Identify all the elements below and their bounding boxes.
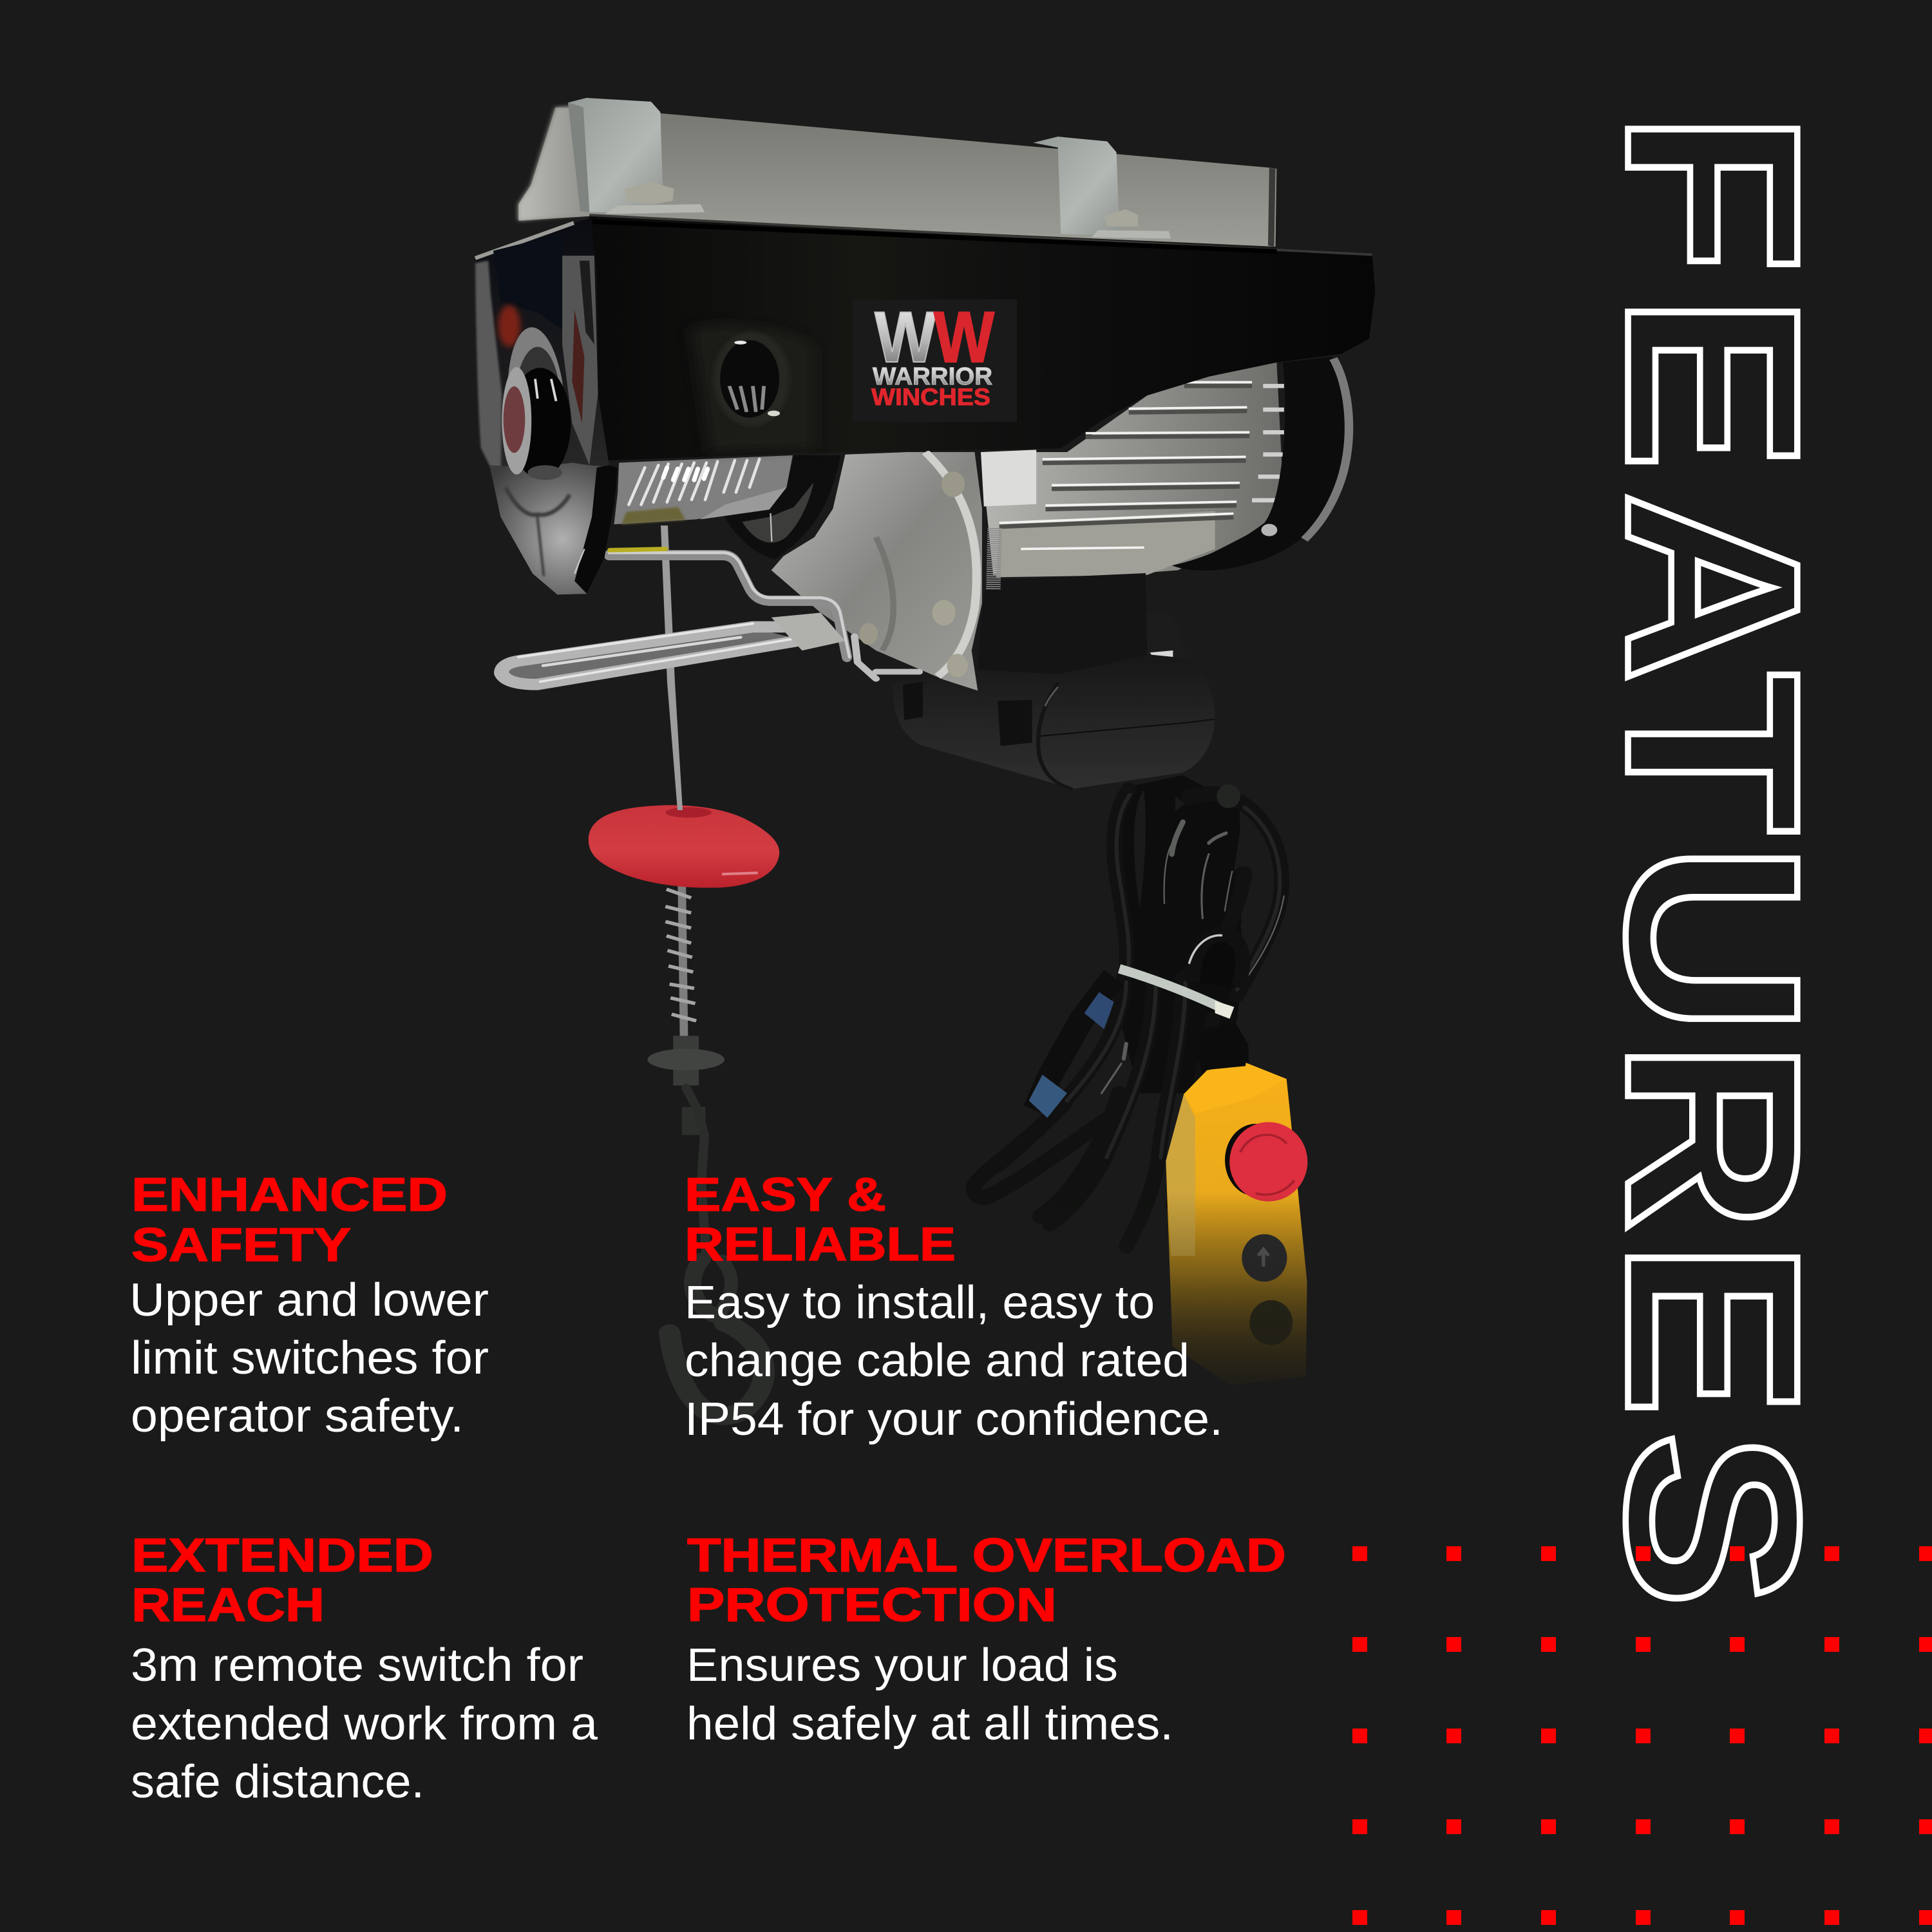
feature: extended reach: [131, 1530, 598, 1808]
upper limit rod: [609, 549, 849, 657]
body: change cable and rated: [685, 1335, 1189, 1387]
black block and control box under motor: [893, 528, 1215, 789]
body: limit switches for: [131, 1332, 489, 1384]
up button: [1242, 1234, 1287, 1282]
logo: Warrior Winches: [853, 297, 1017, 422]
holes between cables: [1134, 790, 1146, 908]
axle cap: [502, 367, 531, 475]
housing sheen: [691, 325, 815, 452]
feature: enhanced safety: [129, 1169, 489, 1442]
logo word WINCHES: WINCHES: [871, 384, 990, 410]
cable loop: [1193, 934, 1243, 987]
shell tabs: [998, 700, 1032, 746]
block: [978, 573, 1147, 674]
control box shell: [893, 655, 1215, 789]
bolt left: [605, 204, 705, 214]
heading: EASY &: [685, 1169, 886, 1221]
wire rope: [661, 526, 683, 810]
hoist lower assembly: limit weight and stop: [589, 805, 779, 1135]
body: operator safety.: [131, 1390, 464, 1442]
bolt right: [1092, 230, 1171, 239]
feature: easy and reliable: [685, 1169, 1223, 1445]
limit stop and rod: [682, 1107, 705, 1135]
red weight disc: [589, 805, 779, 888]
body: Upper and lower: [129, 1274, 489, 1326]
spring: [682, 886, 684, 1036]
motor body and fins: [981, 363, 1284, 575]
cable sheen: [1067, 795, 1280, 1157]
logo word WARRIOR: WARRIOR: [873, 363, 992, 390]
feature: thermal overload protection: [687, 1530, 1286, 1750]
yellow pendant control: [1166, 1045, 1307, 1385]
body: Easy to install, easy to: [685, 1277, 1155, 1329]
rear knob: [1147, 612, 1188, 659]
main black housing: [587, 215, 1376, 460]
logo: Warrior Winches: W: [934, 297, 994, 377]
heading: RELIABLE: [685, 1218, 956, 1271]
power cable bundle: [973, 775, 1284, 1246]
axle boss rings: [503, 325, 570, 482]
body: 3m remote switch for: [131, 1640, 583, 1691]
body: held safely at all times.: [687, 1698, 1173, 1750]
gearbox bolts: [942, 471, 965, 497]
plug overlap: [1202, 1045, 1248, 1070]
heading: SAFETY: [131, 1219, 351, 1271]
vertical title: FEATURES: FEATURES: [1575, 111, 1850, 1609]
logo mark WW: W: [875, 297, 936, 377]
body: safe distance.: [131, 1756, 424, 1808]
cable tie: [1119, 969, 1234, 1019]
connector with blue bands: [1035, 978, 1114, 1110]
hoist upper assembly: [518, 98, 1349, 577]
plate dark rim: [574, 465, 618, 594]
wire drum and flange: [614, 455, 841, 560]
heading: THERMAL OVERLOAD: [687, 1530, 1286, 1582]
gearbox casing: [772, 452, 982, 690]
cable plug: [1198, 1022, 1249, 1079]
return spring: [993, 528, 995, 591]
body: Ensures your load is: [687, 1640, 1118, 1691]
dot grid decoration: [1352, 1546, 1932, 1925]
body: extended work from a: [131, 1698, 598, 1750]
plate lower reflections: [489, 463, 616, 594]
motor end cap: [1172, 357, 1348, 571]
logo background: [853, 299, 1017, 422]
photo fade: [547, 1191, 1385, 1475]
shell seam: [1038, 719, 1215, 736]
hook and lower rope: [670, 1088, 764, 1416]
product photo: electric hoist: [475, 98, 1376, 1385]
cable highlights: [1101, 822, 1284, 1094]
down button: [1249, 1300, 1293, 1345]
heading: ENHANCED: [131, 1169, 448, 1221]
heading: PROTECTION: [687, 1579, 1057, 1631]
polished end plate: [475, 218, 618, 594]
release handle: [501, 612, 919, 685]
cable exit hole: [714, 332, 790, 426]
heading: EXTENDED: [131, 1530, 433, 1582]
cylinder edge: [1038, 683, 1072, 789]
heading: REACH: [131, 1579, 325, 1631]
emergency stop button: [1225, 1124, 1287, 1197]
body: IP54 for your confidence.: [685, 1394, 1223, 1445]
bracket left: [568, 98, 663, 212]
bracket right: [1033, 137, 1119, 236]
grey mounting rail: [518, 108, 1276, 247]
